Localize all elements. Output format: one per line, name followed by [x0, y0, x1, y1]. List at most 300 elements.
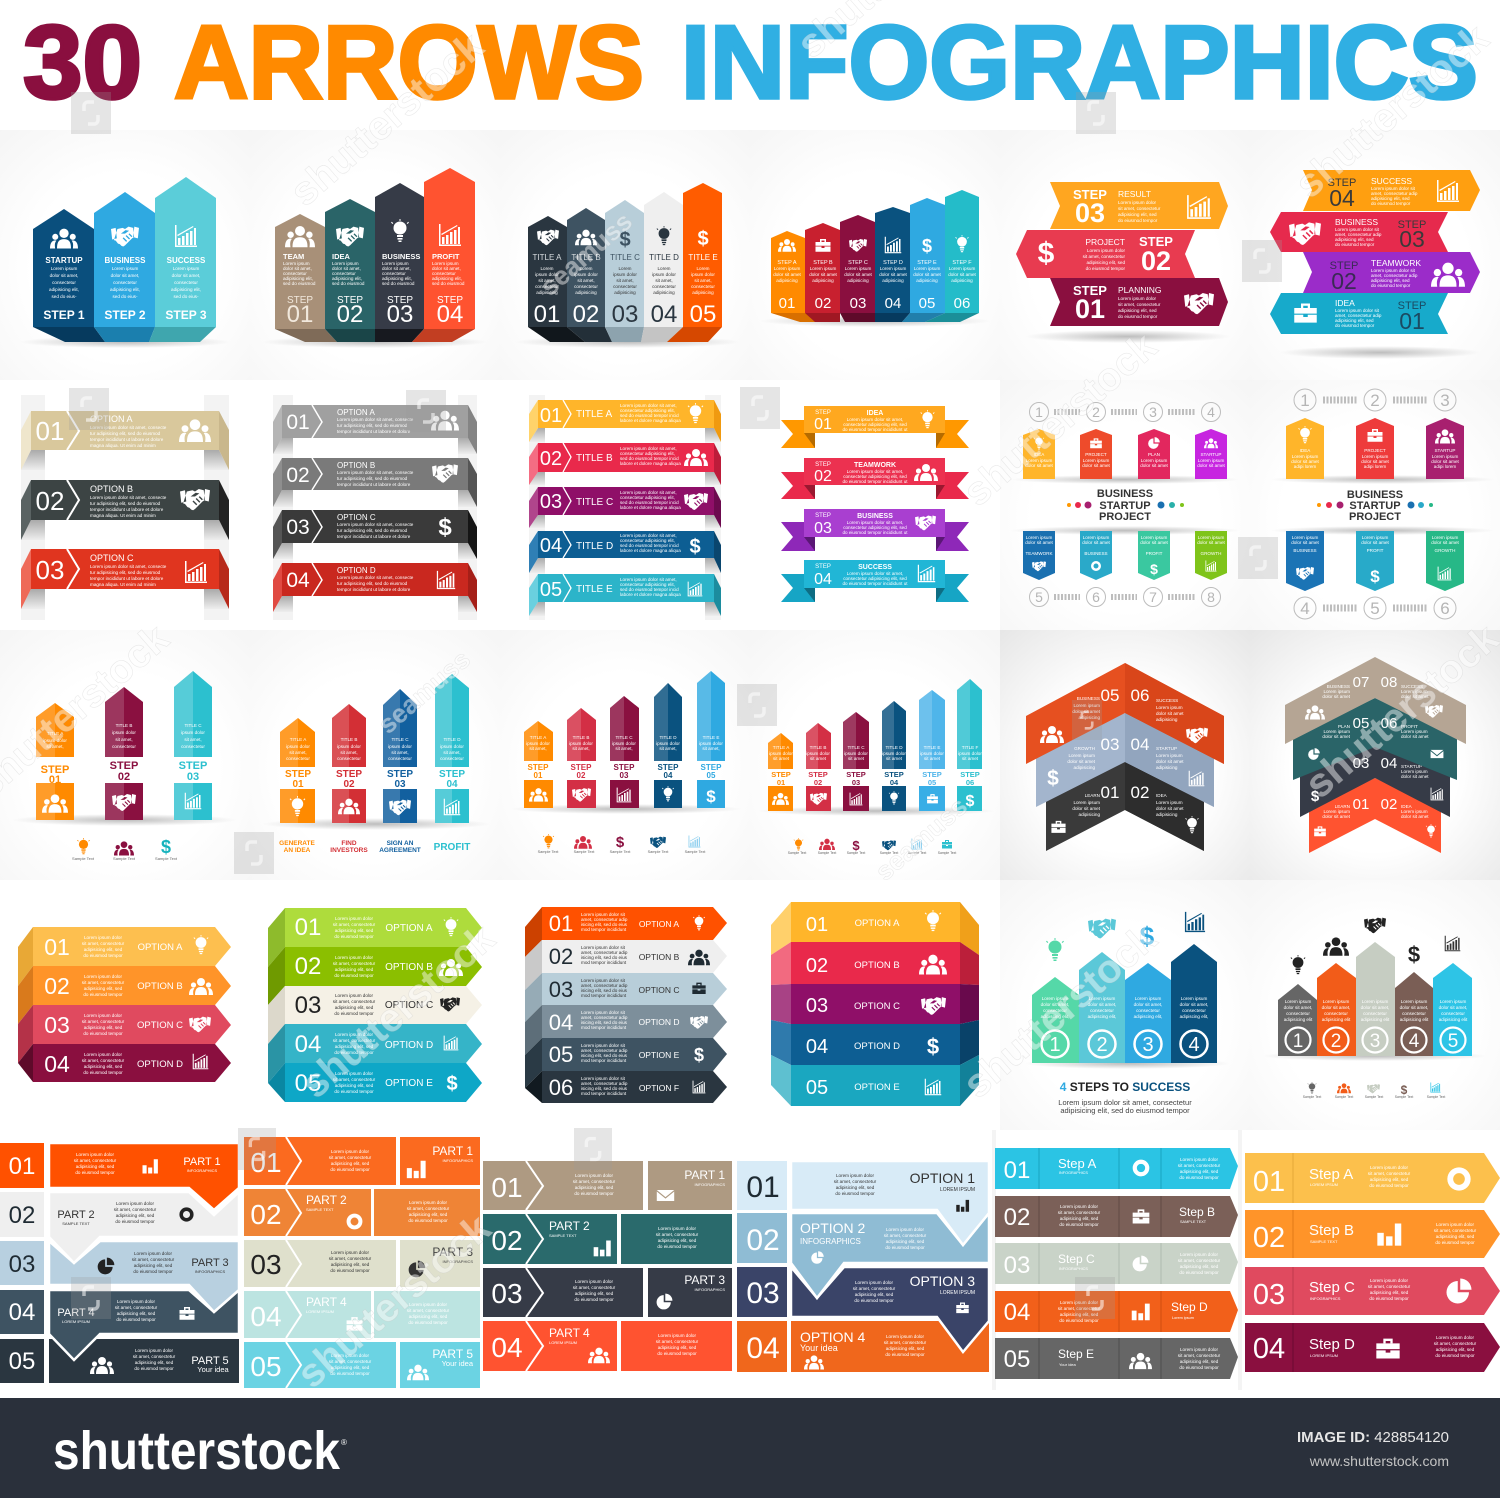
arrow: step 02 teamwork: TEAMWORK	[1371, 258, 1421, 268]
band: 01 option A	[18, 927, 231, 986]
arrow: step 01 idea	[1270, 293, 1448, 334]
row 04	[1245, 1323, 1500, 1372]
band: 01 option A: mod tempor incididunt	[581, 927, 627, 932]
row 05: sit amet, consectetur	[1178, 1353, 1221, 1358]
row 03: do eiusmod tempor	[1369, 1296, 1409, 1301]
band: 01 option A: OPTION A	[639, 919, 679, 929]
band: 02 option B: sit amet, consectetur	[82, 980, 125, 985]
arrow: step C	[840, 215, 875, 322]
row 01: INFOGRAPHICS	[695, 1182, 725, 1187]
panel: six step arrows: dolor sit amet	[809, 272, 838, 277]
panel: three layer chevrons	[1026, 663, 1224, 851]
tags bottom: Lorem ipsum	[1083, 535, 1109, 540]
arrow: step 03 result: 03	[1075, 198, 1105, 228]
arrow: step 04 success: SUCCESS	[1371, 176, 1412, 186]
row 02: 02	[1004, 1204, 1030, 1231]
arrow: idea: dolor sit amet,	[332, 266, 361, 271]
arrow: title D: ipsum dolor	[652, 272, 676, 277]
tile backgrounds	[0, 130, 1500, 1130]
arrow: step D: 04	[885, 295, 901, 312]
band: 05 option E: mod tempor incididunt	[581, 1058, 627, 1063]
tags top: Lorem ipsum	[1141, 458, 1167, 463]
panel: business startup project, six tags: 4	[1300, 599, 1310, 618]
band: option C	[21, 549, 229, 609]
row 04: Lorem ipsum dolor	[1436, 1335, 1474, 1340]
ribbon: step 02 teamwork: STEP	[815, 462, 831, 468]
arrow: business: consectetur	[382, 271, 406, 276]
tags top: Lorem ipsum	[1198, 458, 1224, 463]
band: option A	[21, 411, 229, 470]
band: 03 option C: adipisicing elit, sed	[335, 1005, 374, 1010]
row 01: LOREM IPSUM	[940, 1187, 975, 1193]
arrow 4: adipiscing elit,	[1180, 1014, 1208, 1019]
row 04: 04	[1004, 1299, 1030, 1326]
tags bottom: Lorem ipsum	[1141, 535, 1167, 540]
chevron: 01 02: LEARN	[1085, 793, 1100, 798]
row 02: adipisicing elit, sed	[1436, 1234, 1475, 1239]
panel: business startup project, eight tags: 7	[1149, 589, 1157, 605]
band: 01 option A: OPTION A	[855, 918, 900, 929]
row 02	[1245, 1210, 1500, 1258]
row 05: Your idea	[197, 1365, 230, 1374]
watermarks: seamuss	[372, 644, 476, 740]
band: 03 option C: 03	[295, 992, 321, 1019]
tags top: Lorem ipsum	[1432, 454, 1458, 459]
band: option A: OPTION A	[90, 414, 133, 424]
arrow: step A	[771, 231, 835, 322]
band: 03 option C: OPTION C	[137, 1020, 183, 1031]
arrow: team: consectetur	[283, 271, 307, 276]
arrow 3: Lorem ipsum	[1135, 996, 1161, 1001]
step labels: 06	[966, 778, 974, 787]
row 03: do eiusmod tempor	[133, 1269, 173, 1274]
arrow 3: 3	[1142, 1034, 1154, 1056]
arrow: step 1: STEP 1	[43, 308, 85, 322]
row 03: sit amet, consectetur	[329, 1256, 372, 1261]
panel: business startup project, eight tags: 6	[1092, 589, 1100, 605]
arrow: step 02 project: sit amet, consectetur	[1083, 254, 1125, 259]
chevron: 01 02: dolor sit amet	[1322, 814, 1351, 819]
legend: $	[616, 834, 625, 851]
tags bottom: BUSINESS	[1084, 551, 1108, 556]
band: 02 option B: adipisicing elit, sed	[84, 986, 123, 991]
row 05: 05	[250, 1351, 282, 1382]
arrow: title B: ipsum dolor	[574, 272, 598, 277]
arrow column 2: sit amet,	[340, 750, 358, 755]
band: 01 option A: OPTION A	[138, 942, 183, 953]
row 01: sit amet, consectetur	[1178, 1163, 1221, 1168]
caption: 4 STEPS TO SUCCESS	[1060, 1080, 1190, 1094]
row 01: do eiusmod tempor	[330, 1167, 370, 1172]
arrow: title B: Lorem	[579, 266, 593, 271]
band: 01 option A: 01	[806, 914, 828, 936]
row 01: do eiusmod tempor	[75, 1170, 115, 1175]
row 02: Lorem ipsum dolor	[658, 1226, 696, 1231]
legend: $	[1401, 1083, 1408, 1097]
row 05	[0, 1339, 239, 1383]
band: title B: sed do eiusmod tempor incid	[620, 456, 679, 461]
tags top	[1286, 418, 1464, 479]
band: option B: 02	[36, 486, 64, 516]
panel: six step arrows: dolor sit amet	[844, 272, 873, 277]
watermark badges	[69, 92, 1282, 1319]
ribbon: step 01 idea: Lorem ipsum dolor sit amet,	[847, 417, 903, 422]
arrow: business: dolor sit amet,	[382, 266, 411, 271]
band: 02 option B: Lorem ipsum dolor	[84, 974, 122, 979]
arrow: title A: TITLE A	[533, 253, 562, 262]
arrow column 4: TITLE D	[443, 737, 461, 742]
panel: five mixed arrows: consectetur	[1324, 1011, 1348, 1016]
row 04: sit amet, consectetur	[115, 1305, 158, 1310]
band: 06 option F: OPTION F	[639, 1083, 679, 1093]
heading	[1347, 489, 1403, 523]
chevron: 05 06: dolor sit amet	[1156, 711, 1184, 716]
ribbon: step 02 teamwork: Lorem ipsum dolor sit amet,	[847, 469, 903, 474]
band: title D: sed do eiusmod tempor incid	[620, 543, 679, 548]
row 02: adipisicing elit, sed	[409, 1212, 448, 1217]
band: title E: TITLE E	[576, 584, 613, 595]
arrow: idea: sed do eiusmod	[332, 281, 365, 286]
chevron: 03 04: adipisicing	[1074, 765, 1095, 770]
band: option B: 02	[286, 464, 310, 487]
arrow 1: consectetur	[1043, 1008, 1067, 1013]
row 01: sit amet, consectetur	[74, 1158, 117, 1163]
arrow: title C: adipisicing	[614, 290, 636, 295]
chevron: 07 08: Lorem ipsum	[1401, 689, 1428, 694]
row 01	[995, 1148, 1238, 1189]
arrow: title A: sit amet,	[538, 278, 556, 283]
panel: six step arrows: Lorem ipsum	[914, 266, 940, 271]
arrow: step 02 teamwork	[1303, 252, 1480, 294]
arrow: step 02 project: STEP	[1139, 234, 1173, 249]
row 05	[244, 1342, 480, 1388]
arrow: profit	[412, 168, 475, 342]
arrow columns: ipsum dolor	[882, 751, 906, 756]
arrow: profit: adipisicing elit,	[432, 276, 462, 281]
panel: business startup project, eight tags: 8	[1207, 589, 1215, 605]
row 03: do eiusmod tempor	[1179, 1270, 1219, 1275]
arrow: title E: ipsum dolor	[691, 272, 715, 277]
arrow column 2: consectetur	[337, 756, 361, 761]
arrow: step B: 02	[815, 295, 831, 312]
chevron: 01 02: 02	[1131, 783, 1149, 802]
row 01: adipisicing elit, sed	[1370, 1177, 1409, 1182]
band: 03 option C: 03	[806, 995, 828, 1017]
band: option C: OPTION C	[337, 513, 376, 522]
step labels: STEP	[960, 770, 980, 779]
arrow column 4: ipsum dolor	[440, 744, 464, 749]
row 05: Your idea	[442, 1359, 474, 1368]
ribbon: step 01 idea: IDEA	[867, 410, 883, 417]
row 04	[483, 1321, 732, 1371]
band: title E: 05	[540, 579, 562, 601]
chevron: 05 06: 06	[1381, 715, 1397, 732]
chevron: 03 04: 03	[1101, 735, 1119, 754]
row 03: sit amet, consectetur	[132, 1257, 175, 1262]
ribbon: step 04 success: STEP	[815, 564, 831, 570]
row 05: do eiusmod tempor	[330, 1371, 370, 1376]
arrow: step 01 idea: amet, consectetur adip	[1335, 313, 1382, 318]
ribbon: step 01 idea: 01	[814, 416, 832, 433]
chevron: 07 08: Lorem ipsum	[1323, 689, 1350, 694]
row 04: 04	[491, 1332, 523, 1363]
band: 04 option D: OPTION D	[854, 1041, 900, 1052]
arrow: step 04 success	[1303, 170, 1480, 211]
arrow: step E: 05	[919, 295, 935, 312]
arrow columns: TITLE A	[773, 745, 790, 750]
tags bottom: Lorem ipsum	[1362, 535, 1388, 540]
row 01: 01	[9, 1153, 35, 1180]
row 01: sit amet, consectetur	[834, 1179, 877, 1184]
band: 06 option F: Lorem ipsum dolor sit	[581, 1076, 626, 1081]
arrow: profit: PROFIT	[432, 252, 460, 261]
step labels: 05	[928, 778, 936, 787]
band: option B: OPTION B	[90, 484, 133, 494]
chevron: 05 06: BUSINESS	[1077, 696, 1100, 701]
arrow: step 04 success: Lorem ipsum dolor sit	[1371, 186, 1416, 191]
row 04	[244, 1291, 480, 1338]
arrow: title E: $	[697, 228, 709, 250]
arrow columns: sit amet,	[615, 746, 633, 751]
row 02: Step B	[1179, 1205, 1215, 1219]
panel: six step arrows: adipisicing	[916, 278, 938, 283]
step labels: STEP	[658, 763, 679, 772]
arrow: team: Lorem ipsum	[283, 261, 310, 266]
row 02: SAMPLE TEXT	[1310, 1239, 1338, 1244]
band: option D: OPTION D	[337, 566, 376, 575]
arrow: title D: 04	[651, 301, 677, 328]
row 01: PART 1	[684, 1168, 725, 1182]
arrow: step 03 business: Lorem ipsum dolor sit	[1335, 227, 1380, 232]
arrow columns: ipsum dolor	[569, 741, 593, 746]
ribbon: step 03 business: Lorem ipsum dolor sit amet,	[847, 520, 903, 525]
chevron: 01 02: adipisicing	[1079, 812, 1100, 817]
band: 01 option A: 01	[295, 914, 321, 941]
band: option A: 01	[36, 416, 64, 446]
band: 06 option F: isicing elit, sed do eius	[581, 1086, 628, 1091]
row 05: do eiusmod tempor	[134, 1366, 174, 1371]
panel: five mixed arrows: consectetur	[1402, 1011, 1426, 1016]
arrow: step 01 planning: 01	[1075, 294, 1105, 324]
row 02: sit amet, consectetur	[114, 1207, 157, 1212]
step labels: STEP	[571, 763, 592, 772]
band: title D: 04	[540, 535, 562, 557]
legend: Sample Text	[1303, 1095, 1321, 1099]
band: 06 option F: mod tempor incididunt	[581, 1091, 627, 1096]
site url: www.shutterstock.com	[1309, 1453, 1449, 1469]
arrow: title D: TITLE D	[649, 253, 679, 262]
arrow columns: TITLE E	[924, 745, 940, 750]
arrow: step 3: STEP 3	[165, 308, 207, 322]
chevron: 01 02: 01	[1101, 783, 1119, 802]
chevron: 01 02: 02	[1381, 796, 1397, 813]
panel: five mixed arrows: adipisicing elit	[1322, 1017, 1351, 1022]
band: title D: TITLE D	[576, 541, 613, 552]
chevron: 05 06: dolor sit amet	[1401, 734, 1429, 739]
band: 05 option E: isicing elit, sed do eius	[581, 1053, 628, 1058]
band: option A: 01	[286, 411, 310, 434]
arrow: title D: adipisicing	[653, 290, 675, 295]
arrow column 1: 01	[49, 774, 61, 786]
band: 05 option E: OPTION E	[854, 1082, 900, 1093]
chevron: 03 04: Lorem ipsum	[1156, 753, 1183, 758]
arrow: step 02 teamwork: adipisicing elit, sed	[1371, 278, 1410, 283]
arrow 1: dolor sit amet,	[1041, 1002, 1069, 1007]
arrow: title B: sit amet,	[577, 278, 595, 283]
panel: part 1-4 chevrons	[483, 1161, 732, 1371]
arrow: title B: TITLE B	[571, 253, 601, 262]
arrow: step 02 teamwork: 02	[1331, 268, 1357, 294]
arrow 2: 2	[1096, 1034, 1108, 1056]
legend	[788, 838, 956, 855]
ribbon: step 03 business: consectetur adipisicing elit, sed	[843, 525, 907, 530]
band: 03 option C: OPTION C	[638, 985, 680, 995]
arrow: step E: STEP E	[917, 260, 937, 266]
chevron: 05 06: adipisicing	[1156, 717, 1178, 722]
arrow 2: consectetur	[1090, 1008, 1114, 1013]
row 02: OPTION 2	[800, 1220, 866, 1236]
arrow columns: TITLE F	[962, 745, 978, 750]
tags bottom: dolor sit amet	[1197, 540, 1226, 545]
chevron: 03 04	[1036, 713, 1214, 807]
arrow 3: adipiscing elit,	[1134, 1014, 1162, 1019]
band: 03 option C: sit amet, consectetur	[82, 1019, 125, 1024]
row 03: Lorem ipsum dolor	[1180, 1252, 1218, 1257]
band: option A: tempor incididunt ut labore et dolore	[337, 429, 411, 434]
band: 04 option D: sit amet, consectetur	[82, 1058, 125, 1063]
panel: six step arrows	[760, 190, 990, 327]
arrow 1: Lorem ipsum	[1042, 996, 1068, 1001]
panel: five mixed arrows: dolor sit amet,	[1439, 1005, 1467, 1010]
arrow: idea: IDEA	[332, 252, 351, 261]
panel: six up arrows with boxes	[758, 679, 994, 855]
step labels: 02	[814, 778, 822, 787]
band: 05 option E: $	[694, 1045, 704, 1065]
panel: five title bands	[529, 395, 721, 620]
arrow: team	[275, 214, 337, 342]
chevron: 03 04: 04	[1381, 755, 1397, 772]
arrow: step 04 success: do eiusmod tempor	[1371, 201, 1411, 206]
arrow: step 2: sed do eius-	[112, 294, 138, 299]
row 04: do eiusmod tempor	[116, 1317, 156, 1322]
arrow column 1	[36, 703, 74, 820]
captions: AGREEMENT	[379, 847, 421, 854]
panel: part 1-5 chevrons	[244, 1137, 480, 1388]
arrow columns: ipsum dolor	[612, 741, 636, 746]
row 03: 03	[746, 1277, 780, 1310]
row 01: PART 1	[432, 1144, 473, 1158]
row 05: 05	[9, 1348, 35, 1375]
row 04: sit amet, consectetur	[407, 1308, 450, 1313]
panel: five mixed arrows: dolor sit amet,	[1284, 1005, 1312, 1010]
row 05: Step E	[1058, 1347, 1094, 1361]
arrow: step 02 project	[1016, 230, 1195, 278]
arrow columns: TITLE C	[615, 735, 633, 740]
row 04: PART 4	[306, 1295, 347, 1309]
band: 05 option E: adipisicing elit, sed	[335, 1083, 374, 1088]
band: 02 option B: 02	[295, 953, 321, 980]
band: 03 option C: OPTION C	[854, 1001, 900, 1012]
band: option B: OPTION B	[337, 461, 375, 470]
band: 04 option D: 04	[549, 1010, 573, 1035]
step labels: 01	[534, 771, 543, 780]
tags top: Lorem ipsum	[1026, 458, 1052, 463]
band: option D: tempor incididunt ut labore et dolore	[337, 587, 411, 592]
row 01	[0, 1143, 239, 1210]
band: title B: TITLE B	[576, 453, 613, 464]
band: 02 option B	[18, 966, 231, 1024]
row 03: sit amet, consectetur	[573, 1285, 616, 1290]
row 01: INFOGRAPHICS	[1059, 1171, 1088, 1175]
row 03	[1245, 1267, 1500, 1315]
band: title E: consectetur adipisicing elit,	[620, 582, 675, 587]
row 02: do eiusmod tempor	[1059, 1222, 1099, 1227]
band: option D: Lorem ipsum dolor sit amet, consecte	[337, 575, 414, 580]
legend	[1303, 1082, 1445, 1099]
panel: six step arrows: adipisicing	[882, 278, 904, 283]
heading	[1097, 488, 1153, 523]
step labels: 04	[890, 778, 899, 787]
panel: five mixed arrows: consectetur	[1286, 1011, 1310, 1016]
band: title D: Lorem ipsum dolor sit amet,	[620, 533, 677, 538]
row 01: 01	[1253, 1166, 1285, 1198]
band: 04 option D: 04	[44, 1051, 70, 1077]
band: 02 option B: OPTION B	[854, 960, 900, 971]
row 04: sit amet, consectetur	[1058, 1306, 1101, 1311]
arrow columns: sit amet	[848, 756, 865, 761]
legend: Sample Text	[818, 851, 836, 855]
arrow column 3: sit amet,	[184, 737, 202, 742]
band: title C: consectetur adipisicing elit,	[620, 495, 675, 500]
arrow: business: adipisicing elit,	[382, 276, 412, 281]
chevron: 05 06: 05	[1101, 686, 1119, 705]
chevron: 05 06: Lorem ipsum	[1323, 729, 1350, 734]
row 02: Lorem ipsum dolor	[409, 1200, 447, 1205]
arrow: title D: Lorem	[657, 266, 671, 271]
title	[23, 5, 1478, 121]
tags bottom: Lorem ipsum	[1026, 535, 1052, 540]
caption	[1058, 1080, 1192, 1115]
step labels: 05	[707, 771, 716, 780]
band: 03 option C: sit amet, consectetur	[333, 999, 376, 1004]
arrow columns: ipsum dolor	[526, 741, 550, 746]
tags top: Lorem ipsum	[1362, 454, 1388, 459]
arrow column 1	[280, 718, 315, 823]
row 02: Lorem ipsum dolor	[1436, 1222, 1474, 1227]
band: 01 option A: adipisicing elit, sed	[335, 928, 374, 933]
arrow: title D: consectetur	[652, 284, 676, 289]
band: 02 option B: do eiusmod tempor	[83, 992, 123, 997]
step labels: STEP	[884, 770, 904, 779]
band: 03 option C: OPTION C	[385, 1000, 433, 1011]
row 03: sit amet, consectetur	[1368, 1284, 1411, 1289]
ribbon: step 03 business: do eiusmod tempor incididunt ut	[842, 530, 908, 535]
band: 05 option E: $	[446, 1073, 458, 1095]
legend: Sample Text	[1395, 1095, 1413, 1099]
panel: five mixed arrows: dolor sit amet,	[1361, 1005, 1389, 1010]
arrow column 2: TITLE B	[116, 723, 132, 728]
ribbon: step 02 teamwork: consectetur adipisicing elit, sed	[843, 474, 907, 479]
row 03: Lorem ipsum dolor	[1370, 1278, 1408, 1283]
row 03: 03	[1004, 1252, 1030, 1279]
arrow column 2: ipsum dolor	[112, 730, 136, 735]
row 03: INFOGRAPHICS	[443, 1259, 473, 1264]
band: 02 option B: sit amet, consectetur	[333, 961, 376, 966]
row 05: Lorem ipsum dolor	[135, 1348, 173, 1353]
row 01: INFOGRAPHICS	[187, 1168, 218, 1173]
arrow 1: adipiscing elit,	[1041, 1014, 1069, 1019]
band: option C: tur adipisicing elit, sed do eiusmod	[90, 570, 161, 575]
